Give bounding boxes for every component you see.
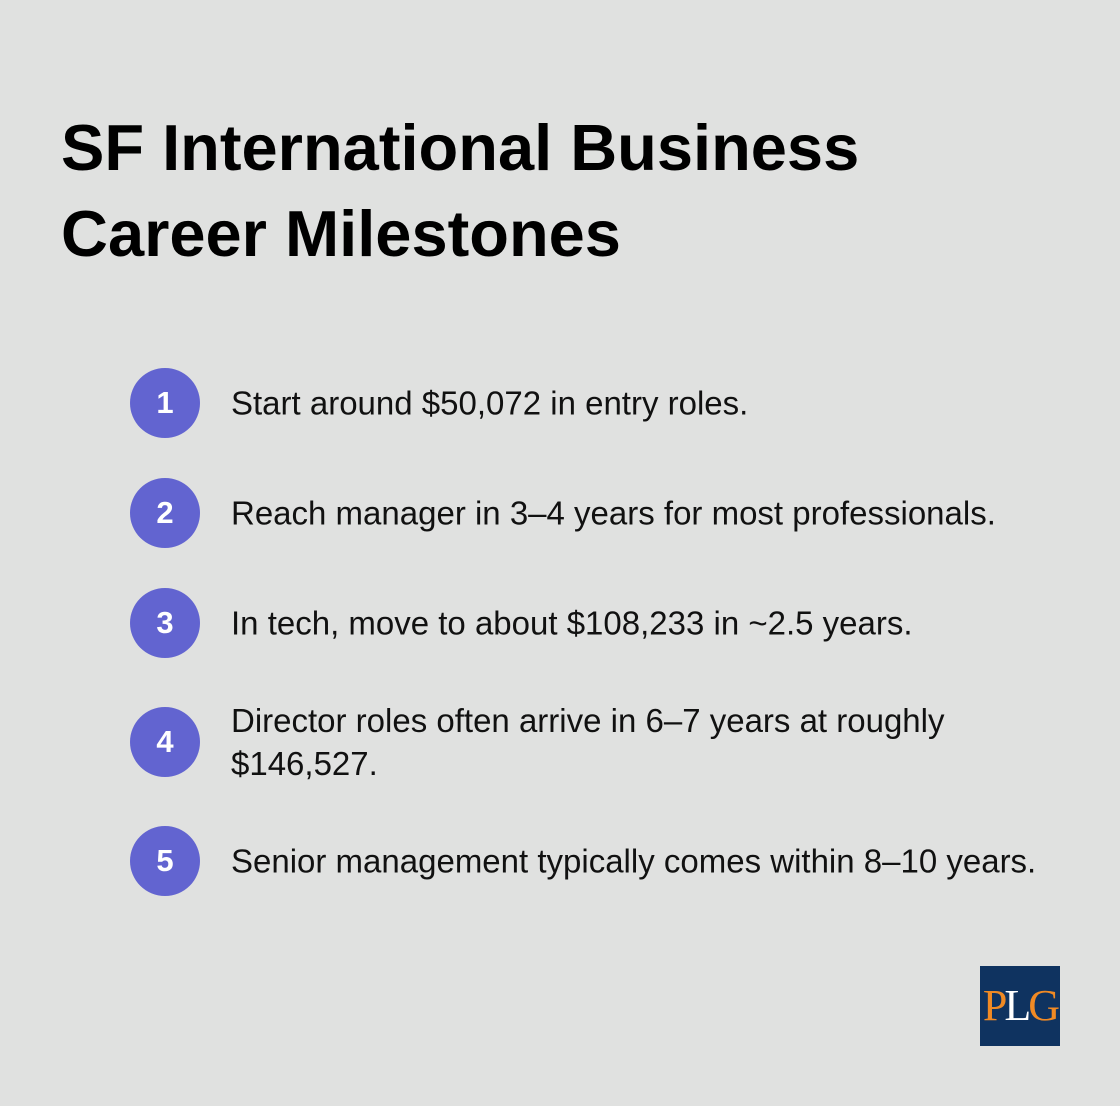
milestone 2: [130, 478, 996, 548]
title: SF International Business: [61, 111, 859, 184]
milestone 3: In tech, move to about $108,233 in ~2.5 years.: [231, 604, 913, 642]
logo: PLG: [983, 981, 1057, 1030]
milestone 2: 2: [156, 495, 174, 530]
milestone 3: 3: [156, 605, 174, 640]
milestone 3: [130, 588, 913, 658]
title: Career Milestones: [61, 197, 621, 270]
milestone 1: 1: [156, 385, 174, 420]
milestone 5: [130, 826, 1036, 896]
milestone 4: 4: [156, 724, 174, 759]
milestone 5: Senior management typically comes within 8–10 years.: [231, 842, 1036, 880]
milestone 4: Director roles often arrive in 6–7 years at roughly $146,527.: [231, 702, 944, 782]
milestone 1: Start around $50,072 in entry roles.: [231, 384, 748, 422]
milestone 1: [130, 368, 748, 438]
title: [61, 111, 859, 270]
milestone 5: 5: [156, 843, 174, 878]
milestone 2: Reach manager in 3–4 years for most professionals.: [231, 494, 996, 532]
logo: [980, 966, 1060, 1046]
